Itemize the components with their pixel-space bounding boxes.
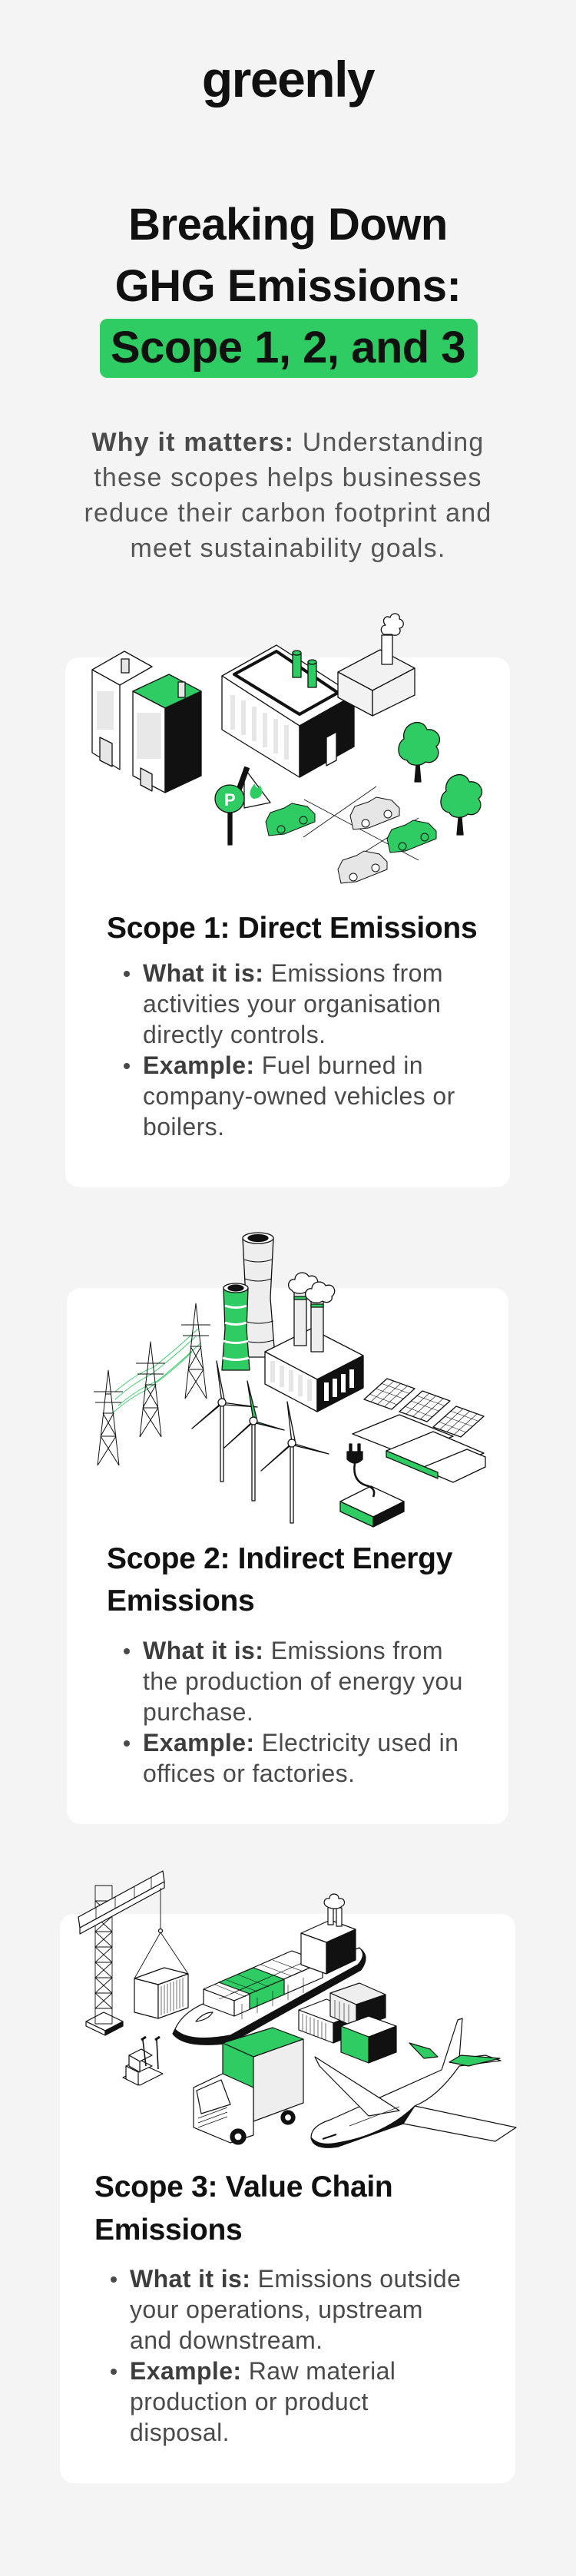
heading: scope 3: Scope 3: Value Chain bbox=[94, 2170, 392, 2204]
bullets: scope 1: What it is: Emissions from bbox=[143, 959, 443, 987]
crane bbox=[86, 2012, 123, 2035]
illustration: scope 2 energy bbox=[94, 1232, 486, 1528]
trolley bbox=[123, 2049, 163, 2085]
heading: scope 3 bbox=[94, 2170, 392, 2247]
bullets: scope 2: purchase. bbox=[143, 1698, 253, 1726]
pylons bbox=[94, 1303, 210, 1465]
bullets: scope 2: offices or factories. bbox=[143, 1760, 355, 1787]
illustration: scope 1 buildings and parking bbox=[91, 613, 482, 883]
building A bbox=[92, 651, 152, 685]
cars bbox=[266, 803, 315, 836]
title: GHG Emissions: bbox=[115, 261, 461, 311]
truck bbox=[223, 2028, 303, 2057]
bullets: scope 2: Example: Electricity used in bbox=[143, 1729, 458, 1757]
heading: scope 2: Emissions bbox=[107, 1584, 254, 1617]
heading: scope 2 bbox=[107, 1542, 453, 1617]
heading: scope 2: Scope 2: Indirect Energy bbox=[107, 1542, 452, 1575]
title highlight box bbox=[100, 319, 478, 378]
intro text: meet sustainability goals. bbox=[130, 534, 446, 563]
bullets: scope 3: What it is: Emissions outside bbox=[130, 2265, 461, 2293]
bullets: scope 1: activities your organisation bbox=[143, 990, 441, 1018]
title: Breaking Down bbox=[128, 200, 448, 250]
bullets: scope 2: What it is: Emissions from bbox=[143, 1637, 443, 1664]
bullets: scope 2: the production of energy you bbox=[143, 1667, 463, 1695]
small building bbox=[338, 650, 415, 690]
bullets: scope 1: directly controls. bbox=[143, 1021, 326, 1048]
illustration: scope 1 buildings and parking: P bbox=[224, 790, 236, 810]
container stack bbox=[299, 1999, 361, 2043]
parking lines bbox=[304, 800, 419, 860]
intro text bbox=[84, 428, 492, 563]
power lines bbox=[112, 1329, 201, 1413]
panel: scope 2 card bbox=[67, 1288, 508, 1824]
intro text: these scopes helps businesses bbox=[94, 463, 482, 492]
plane bbox=[311, 2018, 516, 2147]
battery and plug bbox=[340, 1486, 404, 1517]
bullets: scope 3: your operations, upstream bbox=[130, 2296, 423, 2323]
heading: scope 3: Emissions bbox=[94, 2213, 242, 2247]
bullets: scope 2 bbox=[124, 1637, 463, 1787]
turbines bbox=[220, 1402, 223, 1482]
bullets: scope 1: company-owned vehicles or bbox=[143, 1082, 455, 1110]
panel: scope 1 card bbox=[65, 657, 510, 1187]
bullets: scope 1: Example: Fuel burned in bbox=[143, 1051, 423, 1079]
building B green bbox=[133, 674, 201, 708]
factory bbox=[265, 1329, 363, 1379]
bullets: scope 1 bbox=[124, 959, 455, 1141]
bullets: scope 3: production or product bbox=[130, 2388, 369, 2415]
big tower bbox=[241, 1238, 275, 1357]
bullets: scope 3: Example: Raw material bbox=[130, 2357, 396, 2385]
intro text: Why it matters: Understanding bbox=[92, 428, 484, 457]
title bbox=[111, 200, 465, 372]
ship bbox=[173, 1949, 366, 2045]
panel: scope 3 card bbox=[60, 1914, 515, 2483]
bullets: scope 3: and downstream. bbox=[130, 2326, 323, 2354]
green tower bbox=[222, 1288, 250, 1370]
logo: greenly bbox=[202, 51, 374, 108]
heading: scope 1: Scope 1: Direct Emissions bbox=[107, 912, 477, 945]
factory bbox=[222, 645, 354, 726]
illustration: scope 3 logistics bbox=[78, 1870, 517, 2148]
bullets: scope 3 bbox=[111, 2265, 461, 2446]
bullets: scope 1: boilers. bbox=[143, 1113, 224, 1141]
trees bbox=[415, 747, 421, 782]
P sign bbox=[228, 799, 232, 845]
solar platforms bbox=[353, 1415, 453, 1455]
intro text: reduce their carbon footprint and bbox=[84, 498, 492, 528]
solar panels bbox=[364, 1379, 484, 1437]
title: Scope 1, 2, and 3 bbox=[111, 323, 465, 372]
bullets: scope 3: disposal. bbox=[130, 2419, 230, 2446]
